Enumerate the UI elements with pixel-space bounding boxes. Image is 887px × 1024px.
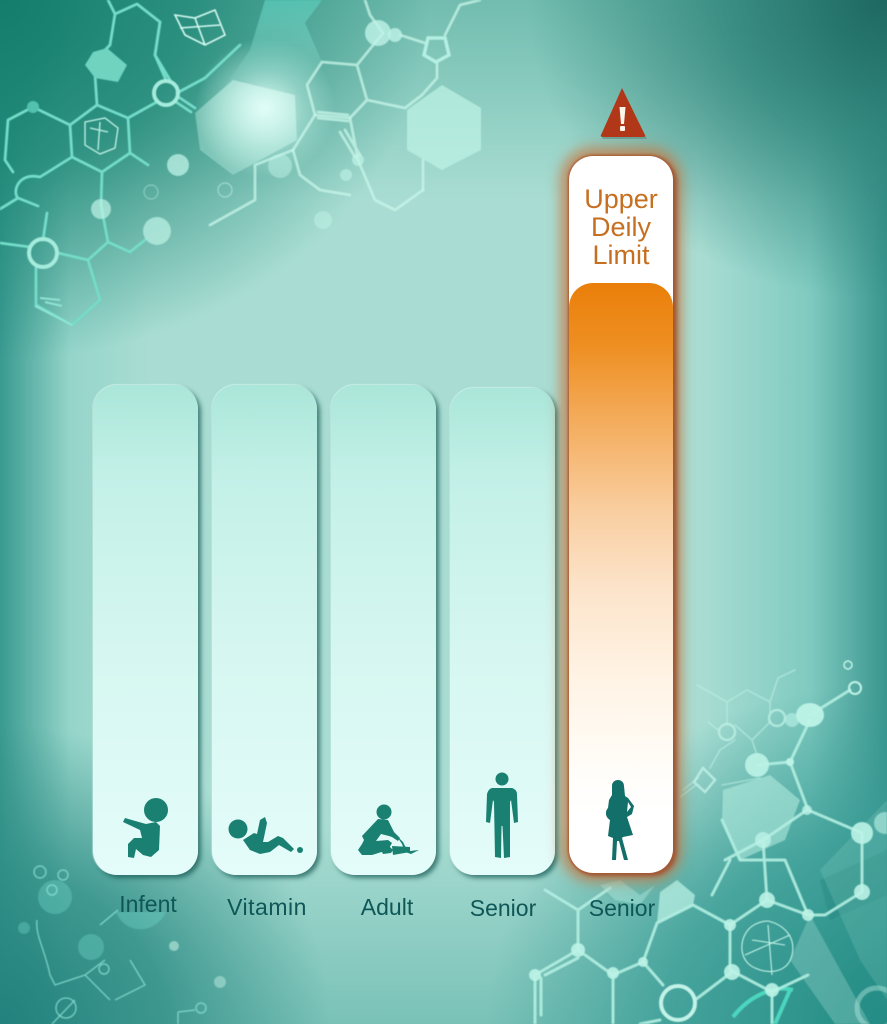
label: infant: Infent [119, 891, 177, 917]
label: senior, highlighted bar: Senior [589, 895, 655, 921]
label: adult: Adult [361, 894, 413, 920]
bar: infant [93, 385, 198, 875]
icon: infant [123, 798, 168, 858]
pale hexagon nodes, top [27, 20, 481, 245]
heading: Upper Daily Limit: Upper [584, 184, 658, 214]
icon: standing woman [606, 780, 634, 860]
bar: upper daily limit (highlighted) [569, 156, 673, 873]
heading: Upper Daily Limit: Limit [592, 240, 650, 270]
bar: adult [331, 385, 436, 875]
label: senior: Senior [470, 895, 536, 921]
bar: senior [450, 388, 555, 875]
heading: Upper Daily Limit: Deily [591, 212, 651, 242]
bar: vitamin [212, 385, 317, 875]
heading: Upper Daily Limit [584, 184, 658, 270]
orange gradient fill [569, 283, 673, 813]
icon: crouching figure [358, 804, 419, 855]
ring nodes, bottom right [661, 661, 887, 1024]
pale round nodes, bottom right [529, 703, 887, 997]
icon: reclining child [228, 817, 303, 854]
label: vitamin: Vitamin [227, 894, 307, 920]
ring nodes, top left [29, 10, 449, 325]
icon: standing man [486, 772, 518, 858]
icon: warning triangle [600, 88, 647, 139]
